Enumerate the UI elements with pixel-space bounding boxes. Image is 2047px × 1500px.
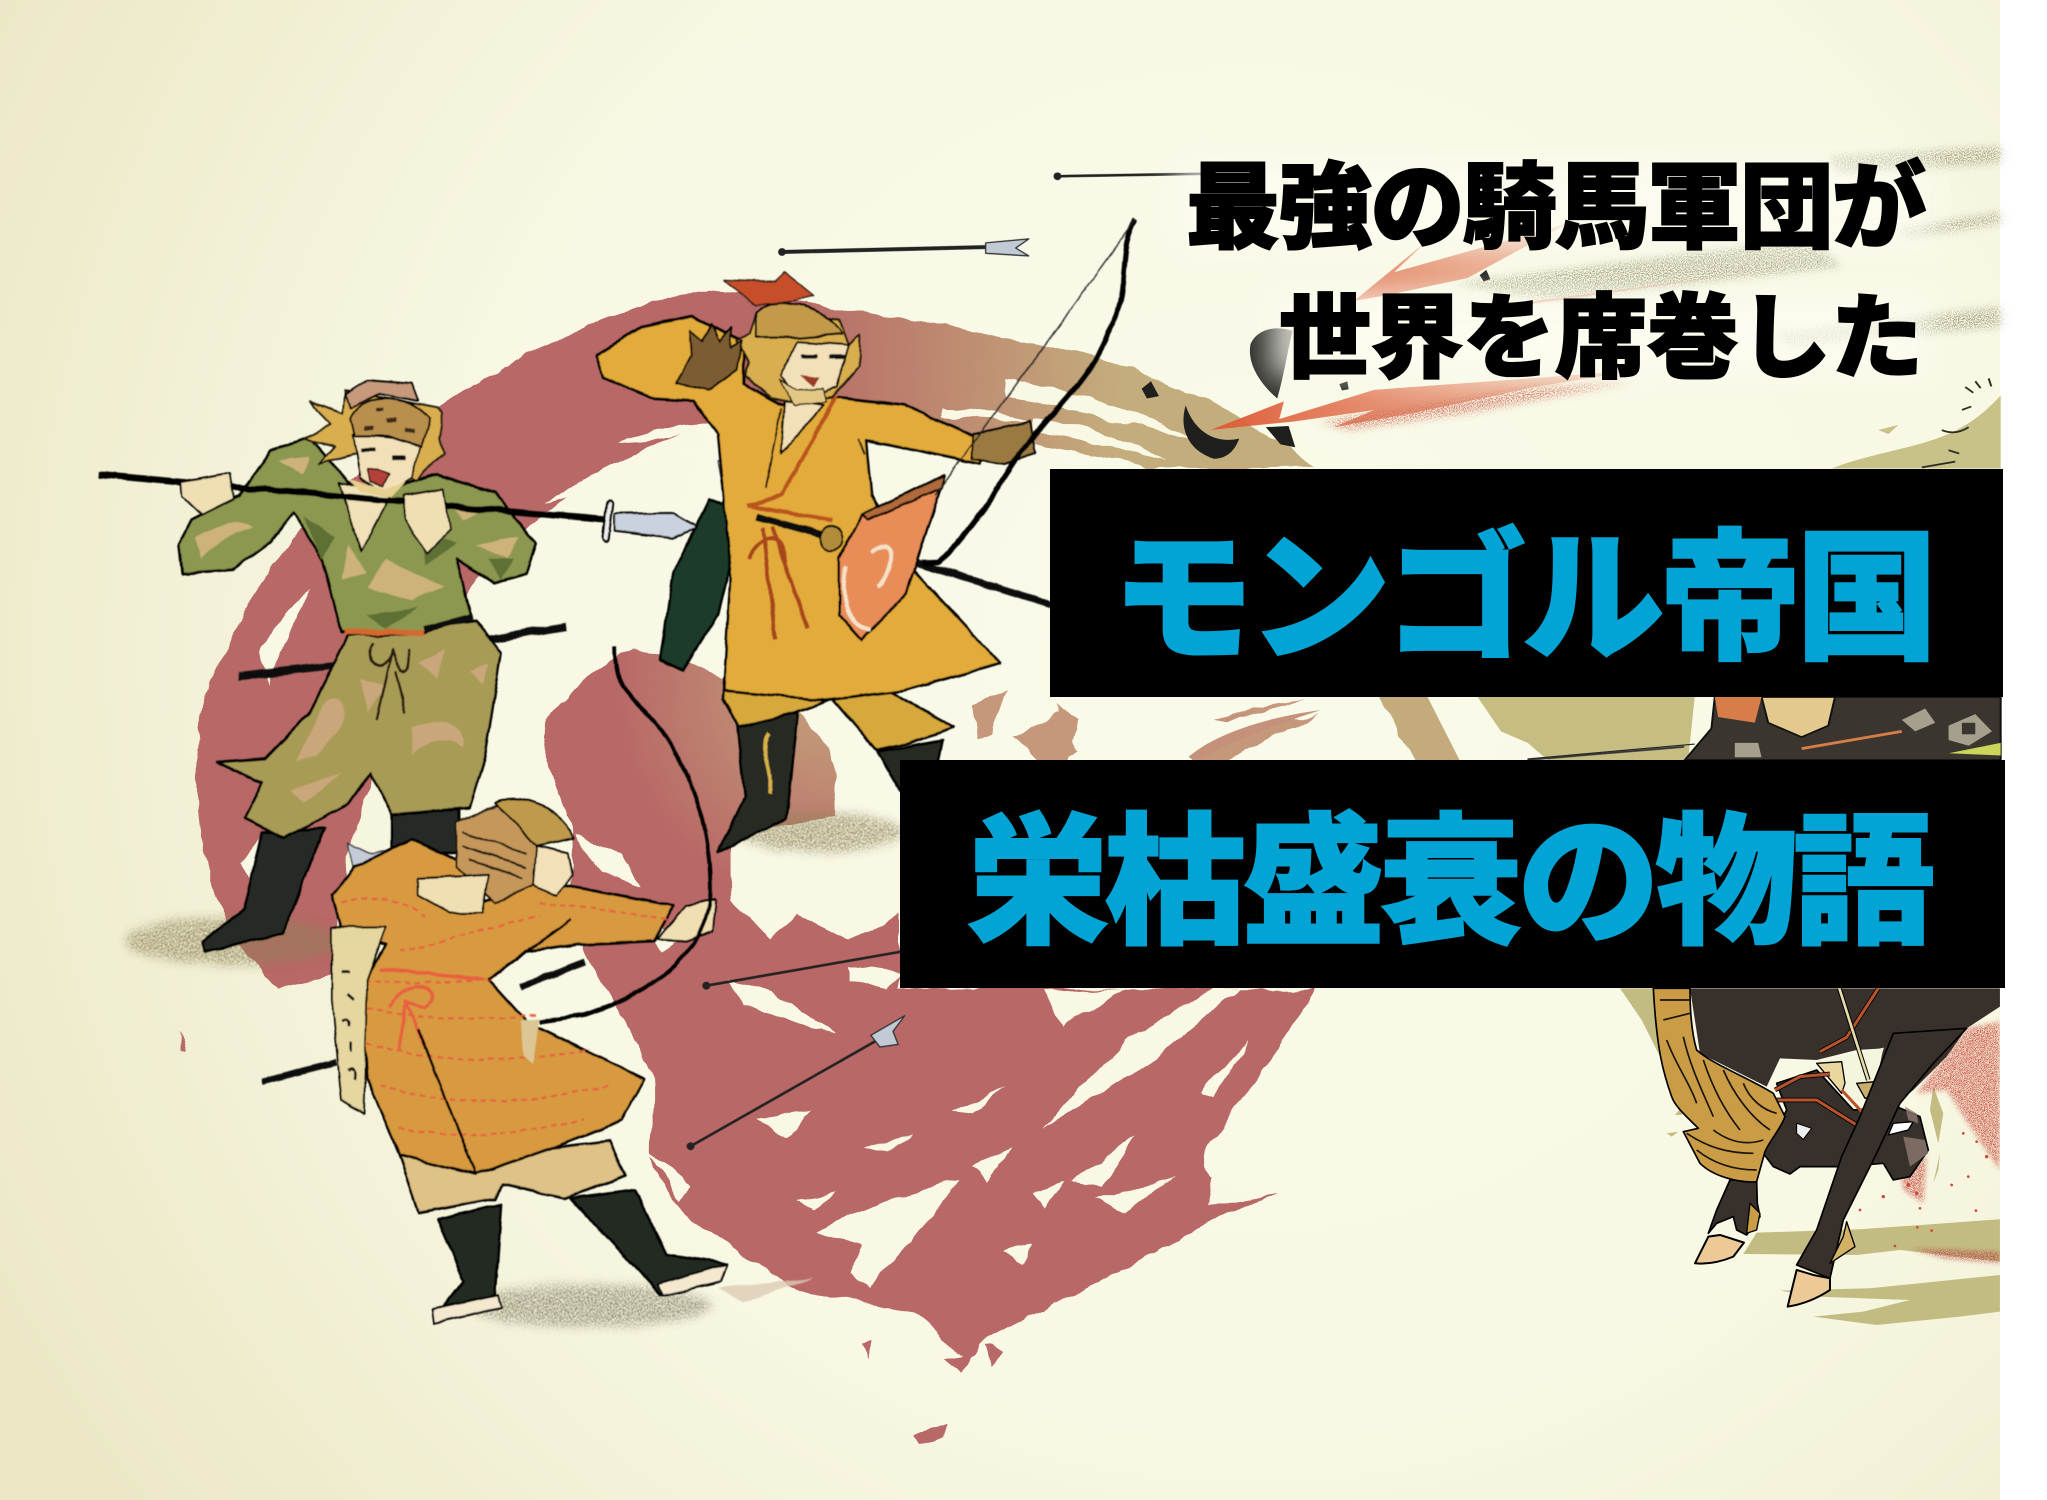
- trousers: [217, 620, 501, 838]
- arrows in quiver: [718, 460, 747, 497]
- soldier: green camouflage spearman: [99, 380, 698, 952]
- brush stroke: outer ring: [197, 289, 1313, 988]
- brush stroke: olive right arc: [1379, 696, 1452, 760]
- spear guard: [606, 504, 610, 538]
- boot soles: [432, 1264, 728, 1323]
- red sash: [380, 969, 485, 1050]
- blood spray: [1859, 1022, 2000, 1263]
- dark scabbard: [661, 501, 745, 671]
- pale wake near third soldier: [718, 1278, 814, 1302]
- gap between harness: [1878, 1048, 1884, 1053]
- near sword: [520, 962, 585, 987]
- back sword: [262, 1062, 336, 1081]
- ground dust left: [125, 917, 342, 965]
- front leg feather: [1830, 1222, 1855, 1263]
- coat: [179, 438, 536, 636]
- burst of streaks and shards top right: [1142, 146, 2001, 760]
- boots: [718, 713, 943, 852]
- mane tuft: [1817, 1062, 1845, 1093]
- trousers: [723, 678, 954, 749]
- boots: [434, 1190, 728, 1320]
- muzzle: [1903, 1107, 1928, 1167]
- helmet: [351, 399, 430, 446]
- boot ornament: [765, 734, 770, 794]
- olive ground strokes: [1620, 988, 2000, 1325]
- arrow top: [1054, 172, 1208, 180]
- cream streaks over the brush: [242, 420, 1273, 1286]
- grey smears: [1454, 146, 2001, 347]
- red streaks: [1210, 370, 1641, 430]
- face: [781, 341, 849, 403]
- sword: [756, 517, 1051, 604]
- red plume: [724, 272, 814, 305]
- tan splatter near the centre: [973, 692, 1319, 777]
- hair: [737, 313, 860, 404]
- spear shaft: [99, 474, 606, 520]
- soldier: orange archer: [262, 646, 728, 1323]
- flying arrows: [687, 172, 1684, 1150]
- front hoof: [1788, 1270, 1830, 1307]
- gloved hand: [677, 324, 742, 390]
- coat quilting: [342, 898, 667, 1135]
- decorated quiver: [839, 476, 944, 639]
- coat: [596, 317, 1000, 700]
- front leg: [1797, 1028, 1967, 1278]
- bow of yellow archer: [922, 219, 1136, 562]
- soldier: yellow archer: [596, 272, 1051, 852]
- teeth: [1888, 1122, 1913, 1135]
- harness reins: [1775, 988, 1878, 1125]
- tan brush flecks: [1188, 710, 1321, 759]
- horse head: [1763, 1070, 1928, 1180]
- olive stroke under first title bar: [1478, 697, 1695, 760]
- face: [353, 434, 421, 494]
- neck and chest: [338, 481, 393, 552]
- title bar one: [1050, 469, 2003, 697]
- quiver marks: [342, 973, 355, 1079]
- bow: [539, 646, 710, 1022]
- leg feather: [1747, 1203, 1760, 1233]
- olive bush right: [1832, 396, 2001, 469]
- belt: [425, 616, 472, 629]
- bush ink marks: [1922, 378, 1991, 467]
- heading: second line: 世界を席巻した: [1279, 288, 1923, 390]
- hair: [456, 804, 539, 902]
- trouser patches: [291, 650, 488, 804]
- left boot: [201, 829, 324, 952]
- cream bands over upper ring: [940, 379, 1195, 460]
- right boot: [393, 810, 460, 853]
- yelling mouth and eyes: [800, 375, 820, 387]
- pale sword tab: [520, 1018, 539, 1064]
- title text two: 栄枯盛衰の物語: [967, 804, 1935, 963]
- helmet leopard spots: [364, 408, 414, 433]
- eyes: [361, 449, 407, 459]
- arrow third: [702, 952, 901, 990]
- face: [533, 846, 573, 895]
- quiver: [332, 927, 386, 1114]
- ground dust under third soldier: [469, 1285, 712, 1327]
- arrow across olive stroke: [1527, 747, 1684, 760]
- beard: [779, 380, 826, 406]
- hand on bow: [972, 422, 1036, 464]
- heading: first line: 最強の騎馬軍団が: [1186, 155, 1926, 260]
- lance shaft: [1839, 988, 1868, 1080]
- far left faint marks: [180, 1029, 188, 1052]
- sword scabbard: [238, 627, 566, 676]
- hand near face: [418, 874, 488, 913]
- back leg: [1708, 1180, 1760, 1235]
- brush circle artwork: [180, 289, 1452, 1446]
- spear blade: [615, 513, 698, 538]
- rider armor strip: [1528, 697, 2001, 760]
- soldiers: [99, 219, 1136, 1327]
- trousers: [399, 1141, 625, 1212]
- arrows: [348, 843, 396, 874]
- hand on bow: [657, 899, 715, 941]
- helmet: [495, 799, 574, 846]
- tan band under first title bar: [1410, 697, 1460, 760]
- collar and sash: [747, 396, 836, 520]
- brush stroke: inner spiral and lower mass: [540, 650, 1316, 1358]
- mane: [1653, 988, 1785, 1182]
- back hoof: [1695, 1235, 1744, 1264]
- horse eye: [1797, 1123, 1812, 1139]
- arrow fourth: [687, 1016, 905, 1150]
- helmet: [756, 303, 842, 338]
- coat fold: [418, 920, 571, 1175]
- white glow behind top heading: [1175, 160, 1935, 378]
- hands: [181, 473, 450, 553]
- title text one: モンゴル帝国: [1112, 520, 1938, 679]
- helmet crown: [345, 380, 418, 408]
- small brush splatter: [862, 1342, 1005, 1446]
- neck: [782, 401, 823, 453]
- coat: [332, 839, 673, 1175]
- arrow second: [778, 239, 1029, 256]
- title bar two: [900, 760, 2005, 988]
- hair spikes: [305, 390, 445, 481]
- ground dust right of second soldier: [737, 813, 903, 852]
- mouth and beard: [368, 469, 389, 486]
- coat patches: [195, 457, 520, 601]
- mane strands: [1660, 1000, 1777, 1170]
- horse body: [1690, 988, 2000, 1094]
- ink shards: [1250, 328, 1293, 398]
- horse: [1620, 988, 2000, 1325]
